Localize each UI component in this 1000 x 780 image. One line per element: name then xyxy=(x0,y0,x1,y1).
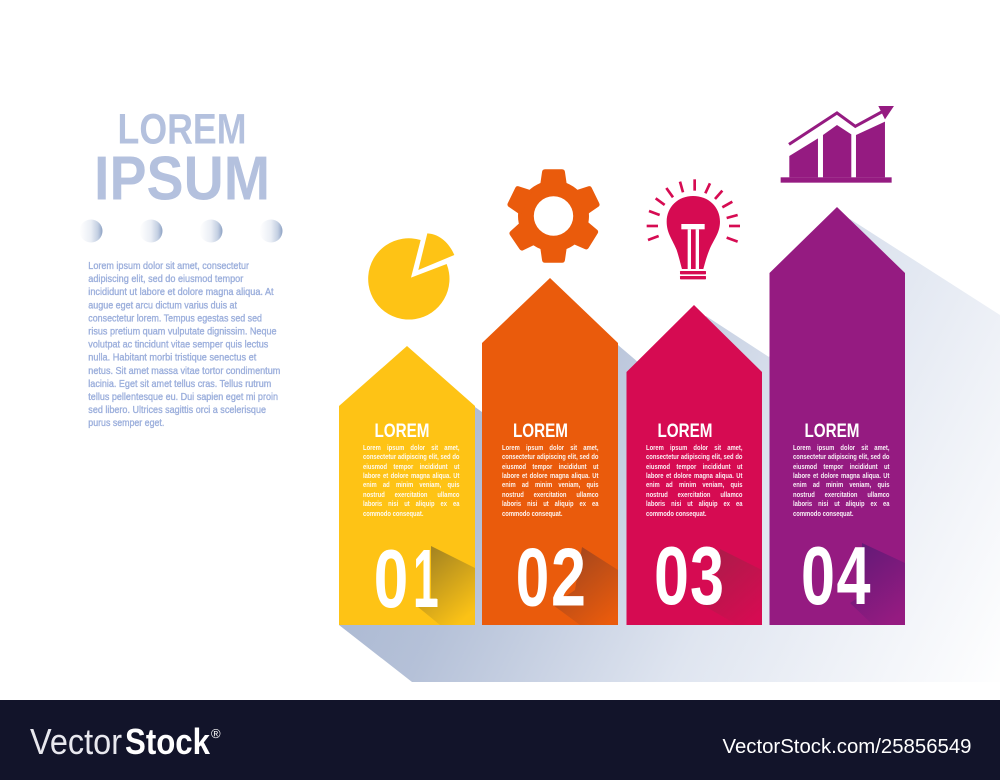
number shadow 01 xyxy=(418,546,475,625)
number 04: 4 xyxy=(836,529,870,622)
card 2 body text: nostrud exercitation ullamco xyxy=(502,490,598,499)
number 02: 2 xyxy=(551,530,586,624)
card 4 body text: laboris nisi ut aliquip ex ea xyxy=(793,499,890,508)
card 1 body text xyxy=(363,443,460,518)
card 4 body text: Lorem ipsum dolor sit amet, xyxy=(793,443,890,452)
long drop shadow behind bars xyxy=(339,219,1000,682)
intro paragraph: sed libero. Ultrices sagittis orci a scelerisque xyxy=(88,404,266,416)
heading 3: LOREM xyxy=(658,421,712,442)
card 3 body text xyxy=(646,443,743,518)
number 04 xyxy=(801,529,870,622)
icon: gear xyxy=(506,169,601,263)
card 3 body text: enim ad minim veniam, quis xyxy=(646,480,742,489)
intro paragraph: nulla. Habitant morbi tristique senectus et xyxy=(88,352,256,364)
title xyxy=(94,106,270,214)
heading 4: LOREM xyxy=(804,421,860,442)
intro paragraph: purus semper eget. xyxy=(88,417,164,429)
card 1 body text: consectetur adipiscing elit, sed do xyxy=(363,452,459,461)
card 4 body text: eiusmod tempor incididunt ut xyxy=(793,462,890,471)
card 1 body text: commodo consequat. xyxy=(363,509,423,518)
card 1 body text: labore et dolore magna aliqua. Ut xyxy=(363,471,459,480)
card 3 body text: Lorem ipsum dolor sit amet, xyxy=(646,443,742,452)
number shadow 02 xyxy=(553,547,618,625)
bar 3 crimson xyxy=(626,305,762,625)
card 4 body text: commodo consequat. xyxy=(793,509,854,518)
card 1 body text: enim ad minim veniam, quis xyxy=(363,480,459,489)
intro paragraph: consectetur lorem. Tempus egestas sed sed xyxy=(88,312,262,324)
intro paragraph xyxy=(88,260,281,429)
footer logo: ® xyxy=(211,726,221,741)
heading 2: LOREM xyxy=(513,421,568,442)
card 3 body text: consectetur adipiscing elit, sed do xyxy=(646,452,742,461)
intro paragraph: netus. Sit amet massa vitae tortor condimentum xyxy=(88,365,281,377)
card 4 body text: enim ad minim veniam, quis xyxy=(793,480,890,489)
bar 2 orange xyxy=(482,278,618,625)
footer band xyxy=(0,700,1000,780)
footer url: VectorStock.com/25856549 xyxy=(722,736,972,758)
intro paragraph: volutpat ac tincidunt vitae semper quis lectus xyxy=(88,339,268,351)
card 3 body text: labore et dolore magna aliqua. Ut xyxy=(646,471,742,480)
icon: pie chart xyxy=(368,233,454,320)
title: LOREM xyxy=(118,106,246,154)
card 4 body text: consectetur adipiscing elit, sed do xyxy=(793,452,890,461)
icon: growth chart xyxy=(781,106,894,183)
card 1 body text: Lorem ipsum dolor sit amet, xyxy=(363,443,459,452)
number 03 xyxy=(654,529,724,622)
card 2 body text: enim ad minim veniam, quis xyxy=(502,480,598,489)
number shadow 04 xyxy=(850,543,905,625)
intro paragraph: adipiscing elit, sed do eiusmod tempor xyxy=(88,273,244,285)
intro paragraph: lacinia. Eget sit amet tellus cras. Tellus rutrum xyxy=(88,378,272,390)
intro paragraph: tellus pellentesque eu. Dui sapien eget mi proin xyxy=(88,391,278,403)
footer logo: Stock xyxy=(125,721,211,762)
intro paragraph: Lorem ipsum dolor sit amet, consectetur xyxy=(88,260,249,272)
card 1 body text: eiusmod tempor incididunt ut xyxy=(363,462,459,471)
card 2 body text xyxy=(502,443,599,518)
bar 1 yellow xyxy=(339,346,475,625)
card 2 body text: laboris nisi ut aliquip ex ea xyxy=(502,499,598,508)
title: IPSUM xyxy=(94,144,270,214)
intro paragraph: risus pretium quam vulputate dignissim. Neque xyxy=(88,326,277,338)
card 1 body text: nostrud exercitation ullamco xyxy=(363,490,459,499)
number 01: 0 xyxy=(374,532,408,625)
bar 4 purple xyxy=(770,207,905,625)
number 03: 3 xyxy=(690,529,724,622)
card 4 body text: labore et dolore magna aliqua. Ut xyxy=(793,471,890,480)
number 04: 0 xyxy=(801,529,835,622)
icon: light bulb xyxy=(647,179,740,279)
card 4 body text xyxy=(793,443,890,518)
card 3 body text: eiusmod tempor incididunt ut xyxy=(646,462,742,471)
number 01: 1 xyxy=(413,532,438,625)
intro paragraph: incididunt ut labore et dolore magna aliqua. At xyxy=(88,286,274,298)
card 2 body text: eiusmod tempor incididunt ut xyxy=(502,462,598,471)
footer logo xyxy=(30,721,221,762)
decorative half-circle dots xyxy=(80,220,282,242)
number 02: 0 xyxy=(516,530,549,624)
card 2 body text: commodo consequat. xyxy=(502,509,562,518)
card 1 body text: laboris nisi ut aliquip ex ea xyxy=(363,499,459,508)
card 3 body text: laboris nisi ut aliquip ex ea xyxy=(646,499,742,508)
heading 1: LOREM xyxy=(374,421,430,442)
card 3 body text: commodo consequat. xyxy=(646,509,706,518)
card 3 body text: nostrud exercitation ullamco xyxy=(646,490,742,499)
footer logo: Vector xyxy=(30,721,122,762)
number 03: 0 xyxy=(654,529,689,622)
card 4 body text: nostrud exercitation ullamco xyxy=(793,490,890,499)
number shadow 03 xyxy=(703,549,762,625)
card 2 body text: labore et dolore magna aliqua. Ut xyxy=(502,471,598,480)
card 2 body text: Lorem ipsum dolor sit amet, xyxy=(502,443,598,452)
number 02 xyxy=(516,530,586,624)
card 2 body text: consectetur adipiscing elit, sed do xyxy=(502,452,598,461)
intro paragraph: augue eget arcu dictum varius duis at xyxy=(88,299,237,311)
